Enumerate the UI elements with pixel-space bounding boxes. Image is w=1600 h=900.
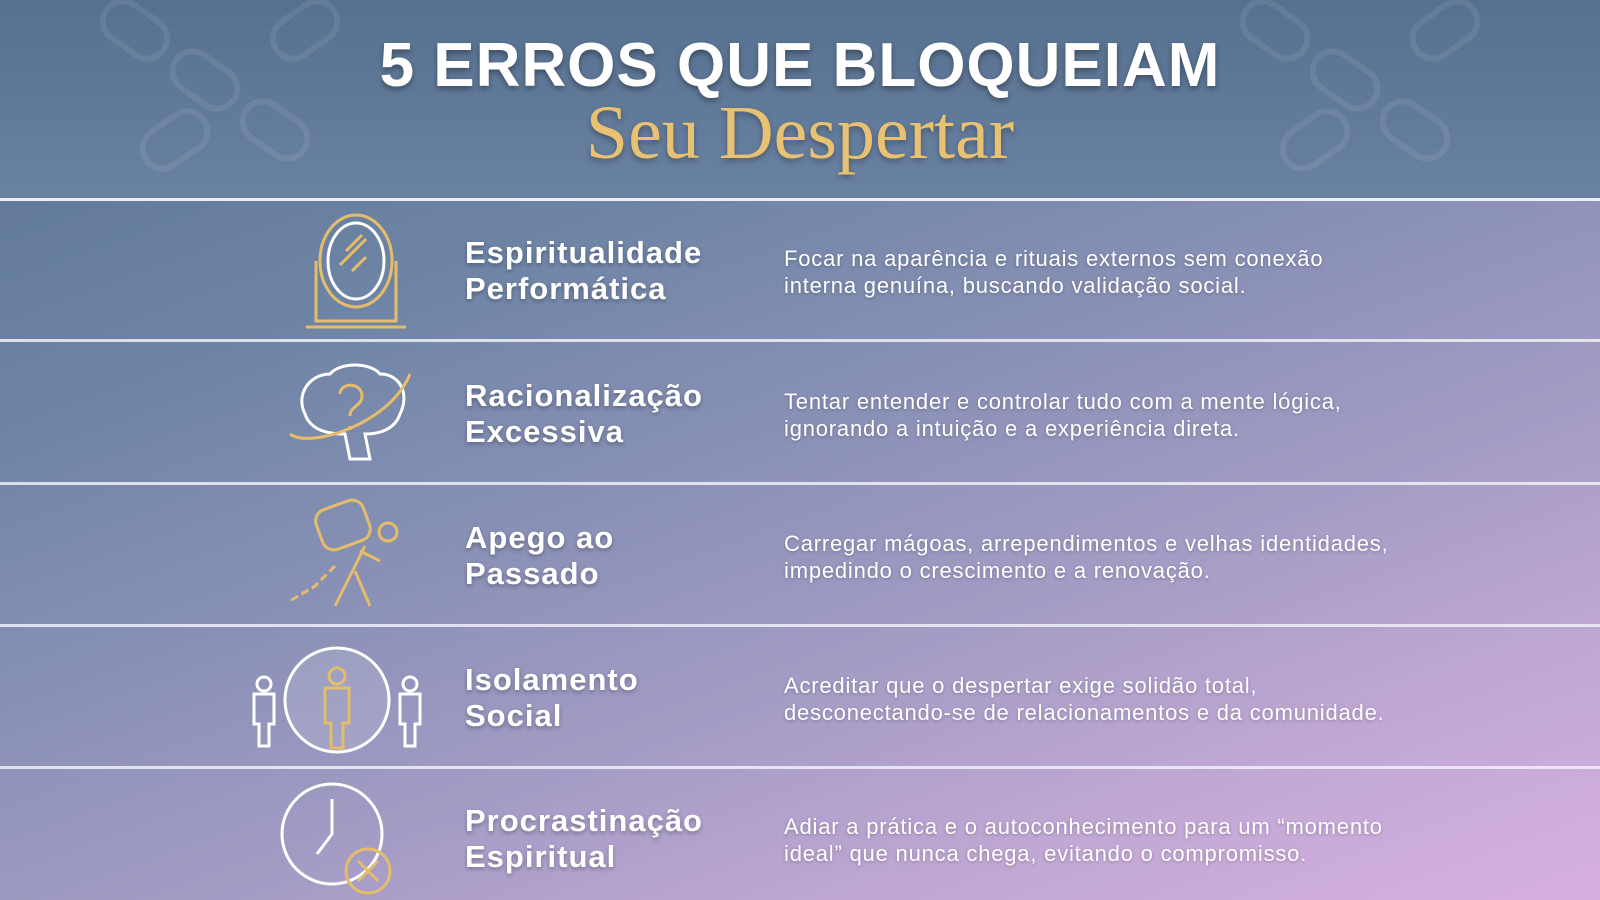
description: Adiar a prática e o autoconhecimento para um “momento <box>784 814 1383 839</box>
description <box>784 531 1389 584</box>
icon: clock with x <box>280 782 392 894</box>
row 4: Isolamento Social <box>0 628 1600 769</box>
title: Social <box>465 698 562 733</box>
title: Excessiva <box>465 414 624 449</box>
icon: mirror <box>306 214 406 328</box>
description: impedindo o crescimento e a renovação. <box>784 558 1211 583</box>
description: ideal” que nunca chega, evitando o compromisso. <box>784 841 1307 866</box>
description <box>784 673 1385 725</box>
description: Acreditar que o despertar exige solidão total, <box>784 673 1257 698</box>
title: Isolamento <box>465 662 639 697</box>
title: Espiritualidade <box>465 235 702 270</box>
icon: brain <box>289 364 412 460</box>
icon: person in bubble <box>252 646 422 754</box>
row 3: Apego ao Passado <box>0 486 1600 627</box>
decorative chains left <box>100 0 340 172</box>
description: desconectando-se de relacionamentos e da comunidade. <box>784 700 1385 725</box>
title <box>464 520 614 591</box>
description: Tentar entender e controlar tudo com a mente lógica, <box>784 389 1342 414</box>
title: Performática <box>465 271 667 306</box>
title: Procrastinação <box>465 803 703 838</box>
title <box>465 662 639 733</box>
title: Espiritual <box>465 839 616 874</box>
header <box>0 0 1600 201</box>
decorative chains right <box>1240 0 1480 172</box>
title <box>465 803 703 878</box>
title <box>465 235 702 306</box>
description <box>784 246 1323 300</box>
icon: person carrying burden <box>290 498 398 606</box>
description: interna genuína, buscando validação social. <box>784 273 1246 298</box>
row 1: Espiritualidade Performática <box>0 201 1600 342</box>
title: Passado <box>465 556 600 591</box>
description <box>784 389 1342 442</box>
description: ignorando a intuição e a experiência direta. <box>784 416 1240 441</box>
row 5: Procrastinação Espiritual <box>280 782 1383 894</box>
title <box>465 378 703 449</box>
row 2: Racionalização Excessiva <box>0 344 1600 485</box>
description <box>784 814 1383 868</box>
description: Carregar mágoas, arrependimentos e velhas identidades, <box>784 531 1389 556</box>
title: Apego ao <box>465 520 614 555</box>
subtitle: Seu Despertar <box>586 91 1014 175</box>
description: Focar na aparência e rituais externos sem conexão <box>784 246 1323 271</box>
title: Racionalização <box>465 378 703 413</box>
title: 5 ERROS QUE BLOQUEIAM <box>380 31 1220 100</box>
